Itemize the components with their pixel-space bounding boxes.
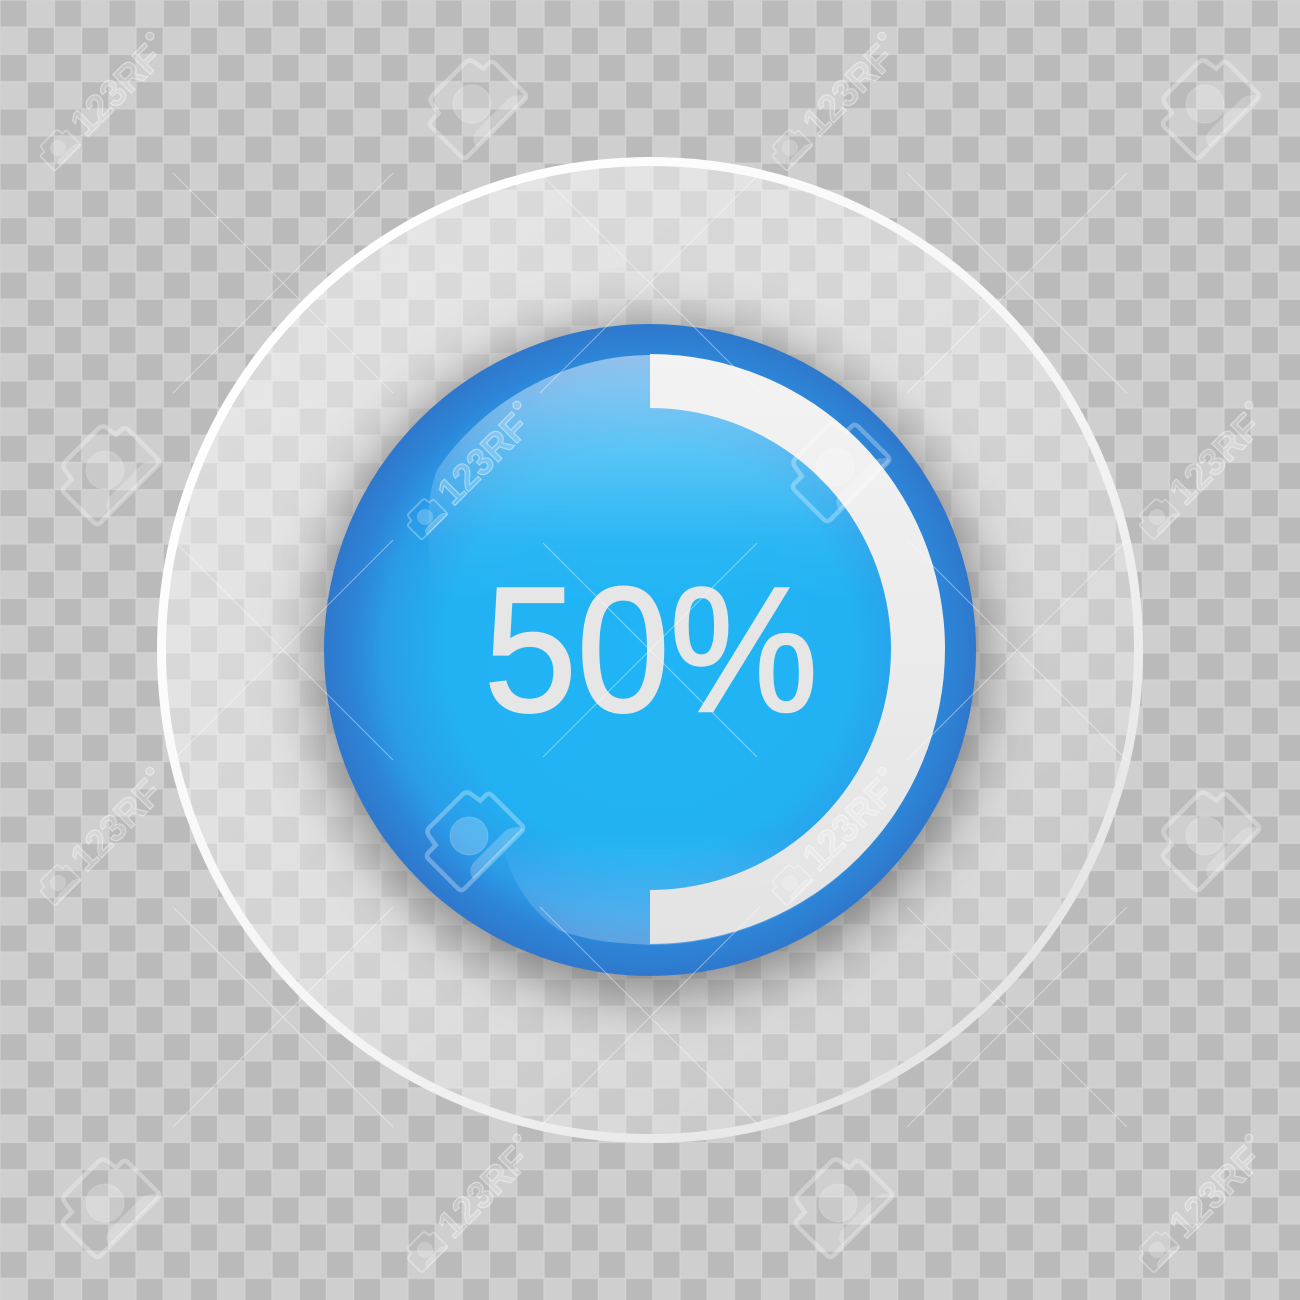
glossy highlights bbox=[428, 355, 870, 945]
pie chart: blue circle with 50% progress arc bbox=[324, 324, 976, 976]
watermarks with wordmark: 123RF bbox=[63, 37, 170, 144]
drop shadow under blue circle bbox=[316, 326, 984, 994]
glass disc bbox=[161, 161, 1139, 1139]
watermarks with wordmark: 123RF bbox=[1162, 1139, 1269, 1246]
blue circle base bbox=[324, 324, 976, 976]
percentage label: 50% bbox=[484, 550, 818, 749]
watermarks with wordmark: 123RF bbox=[63, 772, 170, 879]
watermarks with wordmark: 123RF bbox=[795, 772, 902, 879]
watermarks with wordmark: 123RF bbox=[430, 406, 537, 513]
faint diagonal cross lines bbox=[173, 173, 1127, 1127]
watermarks with wordmark: 123RF bbox=[430, 1139, 537, 1246]
watermarks with wordmark: 123RF bbox=[795, 37, 902, 144]
watermarks with wordmark: 123RF bbox=[1162, 406, 1269, 513]
progress arc 50% bbox=[650, 354, 945, 944]
